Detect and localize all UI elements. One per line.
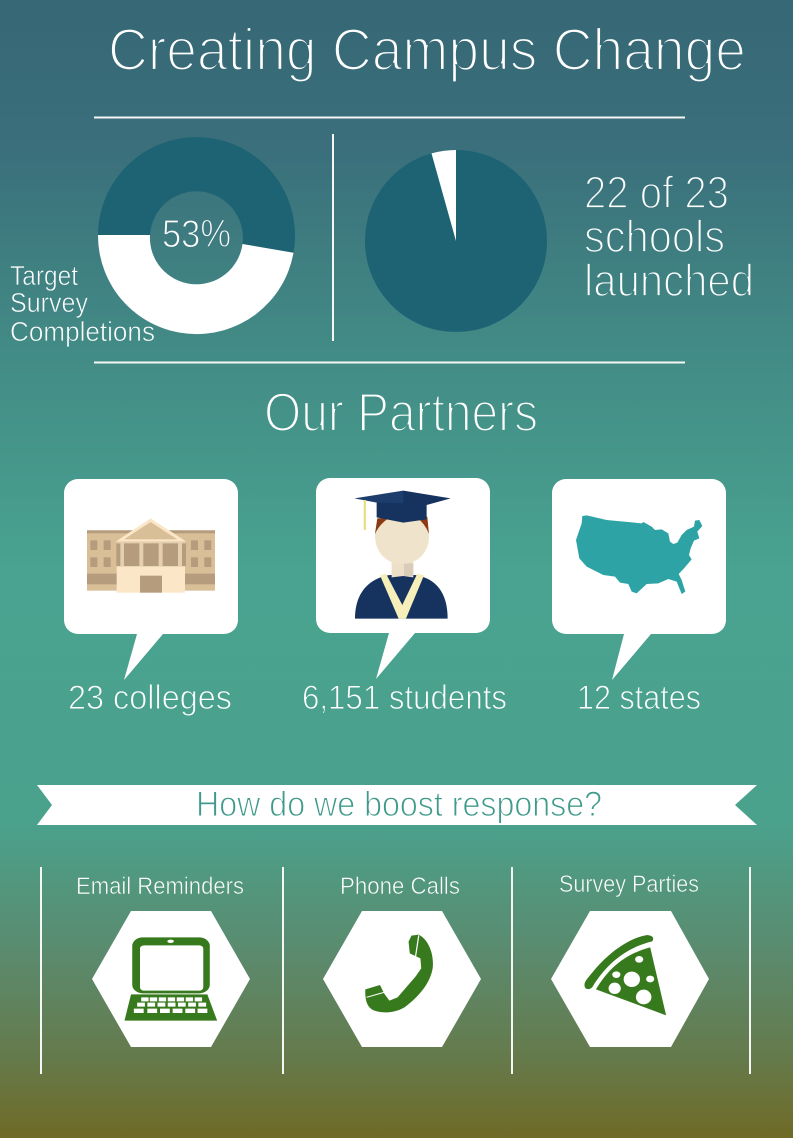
label: email reminders: Email Reminders: [76, 873, 244, 900]
icon: telephone: [365, 935, 433, 1012]
panel: phone calls: [323, 873, 481, 1047]
donut label: Completions: [10, 316, 155, 347]
icon: pizza slice: [584, 935, 666, 1015]
icon: college building: [87, 518, 215, 593]
donut chart: target survey completions: [98, 137, 295, 334]
panel: students: [302, 478, 507, 717]
label: phone calls: Phone Calls: [340, 873, 460, 900]
heading: our partners: Our Partners: [264, 381, 538, 443]
schools launched text: launched: [584, 255, 754, 306]
label: 12 states: 12 states: [577, 679, 701, 717]
donut label: Survey: [10, 287, 88, 318]
panel: email reminders: [76, 873, 250, 1047]
icon: US map: [576, 515, 702, 594]
donut label: [10, 260, 155, 347]
label: survey parties: Survey Parties: [559, 871, 699, 898]
icon: laptop: [124, 937, 217, 1021]
panel: colleges: [64, 479, 238, 717]
panel: survey parties: [551, 871, 709, 1047]
schools launched text: 22 of 23: [584, 167, 729, 218]
icon: graduate: [354, 491, 451, 619]
donut chart: target survey completions: 53%: [162, 213, 231, 256]
banner: how do we boost response: How do we boost response?: [196, 785, 602, 824]
donut label: Target: [10, 260, 78, 291]
pie chart: schools launched: [365, 150, 547, 332]
schools launched text: [584, 167, 754, 306]
banner: how do we boost response: [37, 785, 757, 825]
label: 23 colleges: 23 colleges: [68, 679, 232, 717]
label: students count: 6,151 students: [302, 679, 507, 717]
title: Creating Campus Change: [108, 17, 746, 83]
schools launched text: schools: [584, 211, 725, 262]
panel: states: [552, 479, 726, 717]
